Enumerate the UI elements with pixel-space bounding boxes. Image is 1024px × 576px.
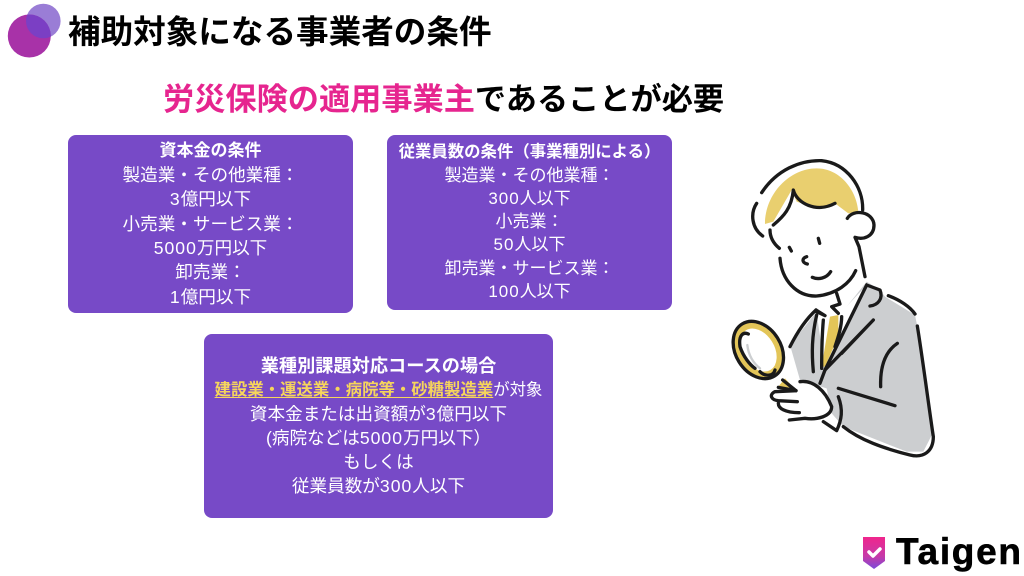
capital line 6: 1億円以下 — [170, 287, 251, 307]
ear — [847, 213, 874, 277]
head and hair outline — [762, 161, 863, 210]
shirt fill — [817, 285, 867, 370]
hair fill — [765, 168, 858, 224]
panel heading: capital: 資本金の条件 — [160, 141, 262, 160]
title: 補助対象になる事業者の条件 — [68, 13, 492, 50]
logo: Taigen — [863, 531, 1023, 572]
lens shading — [747, 345, 760, 368]
panel heading: course: 業種別課題対応コースの場合 — [261, 356, 496, 376]
magnifier outline — [723, 312, 794, 388]
employees line 1: 製造業・その他業種： — [444, 166, 614, 185]
heading: requirement: 労災保険の適用事業主であることが必要 — [163, 82, 724, 117]
employees line 5: 卸売業・サービス業： — [444, 259, 614, 278]
icon: overlapping purple circles — [8, 4, 61, 58]
capital line 4: 5000万円以下 — [154, 238, 267, 258]
lens ring — [728, 317, 789, 383]
hand — [771, 381, 832, 420]
capital line 3: 小売業・サービス業： — [123, 214, 298, 234]
course line: hospitals: (病院などは5000万円以下） — [266, 428, 491, 448]
suit fill — [790, 282, 933, 452]
icon: shield check — [863, 537, 885, 569]
logo wordmark: Taigen — [896, 531, 1023, 572]
capital line 2: 3億円以下 — [170, 189, 251, 209]
course line: employees: 従業員数が300人以下 — [292, 476, 465, 496]
collar and suit — [816, 285, 881, 370]
capital line 5: 卸売業： — [175, 262, 246, 282]
handle fill — [778, 378, 796, 391]
panel: employee conditions — [387, 135, 672, 310]
course line: or: もしくは — [343, 452, 414, 472]
course line: capital: 資本金または出資額が3億円以下 — [250, 404, 507, 424]
tie fill — [822, 315, 838, 367]
capital line 1: 製造業・その他業種： — [123, 165, 298, 185]
employees line 6: 100人以下 — [488, 282, 571, 301]
panel heading: employees: 従業員数の条件（事業種別による） — [399, 143, 660, 161]
panel: capital conditions — [68, 135, 353, 313]
employees line 3: 小売業： — [496, 212, 564, 231]
employees line 4: 50人以下 — [494, 235, 565, 254]
target industries: 建設業・運送業・病院等・砂糖製造業が対象 — [215, 381, 542, 399]
employees line 2: 300人以下 — [488, 189, 571, 208]
face — [789, 238, 831, 279]
panel: industry-specific course — [204, 334, 553, 518]
illustration: man with magnifying glass — [732, 159, 935, 458]
